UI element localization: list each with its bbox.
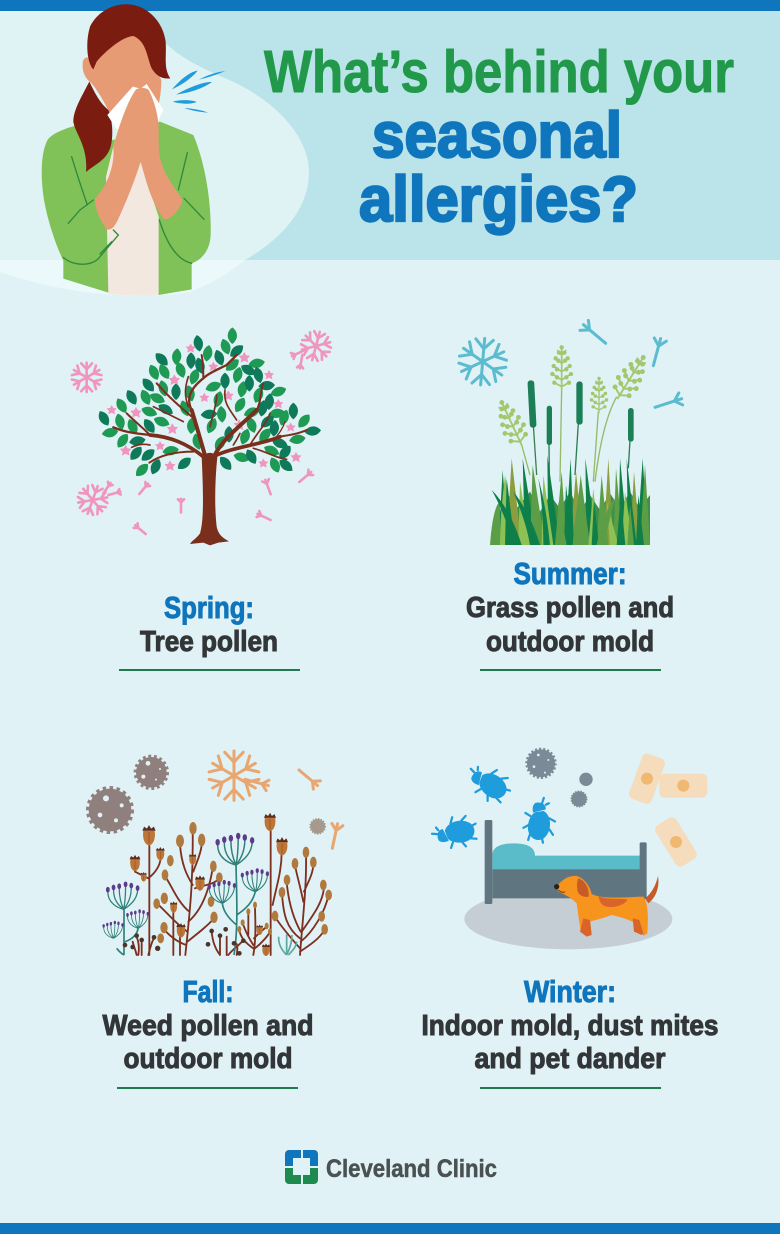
- spring label: Spring:: [164, 590, 254, 625]
- tree branches: [113, 355, 307, 463]
- summer label: Summer:: [514, 556, 626, 591]
- orange pollen: [208, 751, 343, 850]
- summer text line 2: outdoor mold: [486, 626, 654, 658]
- winter text line 2: and pet dander: [474, 1043, 666, 1075]
- illustration: spring tree: [71, 327, 335, 545]
- dust mites: [430, 758, 556, 853]
- illustration: person sneezing: [42, 4, 225, 296]
- spring text: Tree pollen: [140, 626, 278, 658]
- logo mark: [285, 1150, 318, 1184]
- teal stems: [117, 865, 256, 955]
- shirt: [106, 138, 159, 296]
- tree leaves: [101, 327, 313, 479]
- fall label: Fall:: [182, 974, 234, 1009]
- top bar: [0, 0, 780, 11]
- fall text line 2: outdoor mold: [124, 1043, 292, 1075]
- bottom bar: [0, 1223, 780, 1234]
- cattails: [527, 380, 634, 445]
- weed buds: [153, 822, 332, 943]
- caption: spring: [140, 590, 278, 658]
- hair: [73, 4, 170, 172]
- mold spores: [89, 757, 325, 834]
- illustration: fall weeds: [89, 751, 343, 956]
- pink pollen: [71, 328, 335, 536]
- summer text line 1: Grass pollen and: [466, 592, 674, 624]
- sneeze spray: [172, 71, 225, 113]
- dog: [554, 876, 658, 937]
- blue pollen: [456, 320, 684, 413]
- bed: [485, 820, 647, 904]
- title: [264, 39, 734, 235]
- logo: Cleveland Clinic: [285, 1150, 497, 1184]
- weed stems: [133, 825, 328, 955]
- umbels: [102, 833, 297, 955]
- winter label: Winter:: [524, 974, 616, 1009]
- logo wordmark: Cleveland Clinic: [326, 1155, 497, 1183]
- mold spores: [527, 749, 593, 807]
- head: [83, 36, 161, 120]
- grass flower heads: [493, 347, 652, 449]
- fall text line 1: Weed pollen and: [102, 1010, 314, 1042]
- illustration: winter bedroom: [430, 749, 707, 949]
- caption: winter: [422, 974, 718, 1075]
- caption: fall: [102, 974, 314, 1075]
- grass blades: [490, 455, 650, 545]
- caption: summer: [466, 556, 674, 658]
- jacket: [42, 122, 211, 295]
- rug: [464, 889, 672, 949]
- header panel: [0, 11, 780, 296]
- dark seed heads: [123, 927, 246, 956]
- tree blossoms: [107, 343, 301, 471]
- title line 3: allergies?: [359, 163, 638, 235]
- tissue: [107, 84, 163, 129]
- tree trunk: [190, 453, 229, 545]
- seed pods: [130, 813, 288, 956]
- stems: [522, 388, 630, 482]
- title line 2: seasonal: [372, 99, 622, 171]
- pet dander flakes: [628, 752, 707, 869]
- jacket creases: [63, 153, 204, 264]
- illustration: summer grass: [456, 320, 684, 545]
- winter text line 1: Indoor mold, dust mites: [422, 1010, 718, 1042]
- hands and forearms: [95, 88, 183, 230]
